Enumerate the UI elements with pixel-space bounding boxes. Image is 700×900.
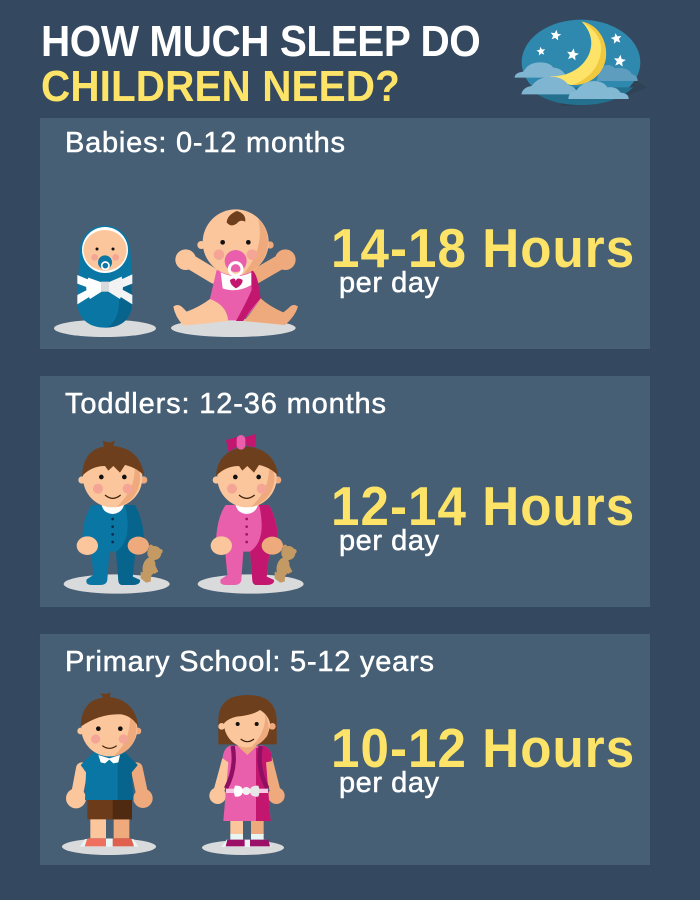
hours: 14-18: 14-18 Hours — [331, 218, 634, 279]
icon: toddler boy — [64, 441, 170, 594]
panel: primary school — [40, 634, 650, 865]
icon: teddy bear — [141, 545, 163, 583]
crescent moon — [550, 22, 606, 85]
icon: school boy — [62, 692, 156, 855]
cloud right — [597, 65, 638, 81]
panel: babies — [40, 118, 650, 349]
heading: primary school: Primary School: 5-12 years — [65, 646, 434, 678]
hours: 12-14: 12-14 Hours — [331, 476, 634, 537]
heading: toddlers: Toddlers: 12-36 months — [65, 388, 386, 420]
icon: teddy bear — [275, 545, 297, 583]
per day: per day — [339, 767, 440, 799]
cloud front — [568, 81, 629, 99]
heading: babies: Babies: 0-12 months — [65, 127, 345, 159]
icon: toddler girl — [198, 434, 304, 594]
cloud left — [515, 62, 566, 78]
title: HOW MUCH SLEEP DO — [41, 16, 481, 65]
icon: sitting baby — [171, 209, 298, 337]
per day: per day — [339, 267, 440, 299]
per day: per day — [339, 525, 440, 557]
icon: moon and clouds — [515, 20, 647, 106]
title: CHILDREN NEED? — [41, 61, 400, 110]
hours: 10-12: 10-12 Hours — [331, 718, 634, 779]
cloud middle — [521, 77, 578, 94]
title — [41, 16, 481, 110]
icon: school girl — [202, 695, 285, 855]
panel: toddlers — [40, 376, 650, 607]
icon: swaddled baby — [54, 226, 156, 337]
